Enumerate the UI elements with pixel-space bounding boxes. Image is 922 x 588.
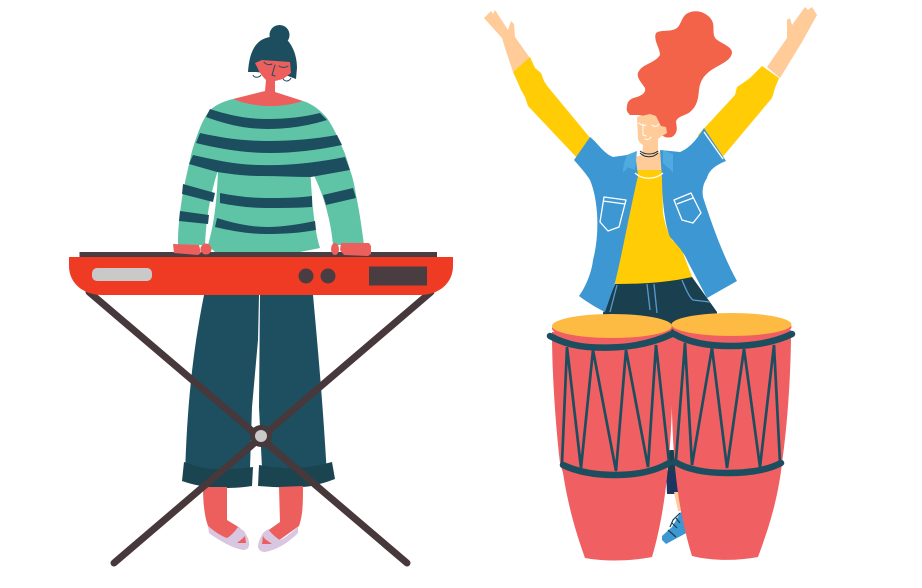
raised arms [484, 7, 817, 78]
shirt neckline [635, 173, 663, 178]
slider [92, 268, 152, 281]
necklace [640, 151, 658, 157]
knobs [298, 268, 336, 284]
pockets [600, 193, 701, 231]
sweater stripes [179, 109, 356, 234]
sweater [178, 99, 364, 252]
hair [627, 11, 732, 138]
left drum body [552, 332, 673, 561]
drummer figure [484, 7, 817, 544]
legs [203, 486, 303, 545]
keys bar [80, 252, 437, 258]
trouser seams [610, 280, 710, 313]
left drum head [552, 314, 672, 340]
sandals [208, 526, 298, 552]
keyboard stand legs [89, 292, 431, 563]
shirt [615, 170, 692, 284]
face features [264, 62, 288, 76]
right drum head [672, 313, 792, 339]
conga drums [550, 313, 792, 561]
keyboard [69, 252, 453, 295]
face features [639, 123, 659, 139]
drum ropes [562, 343, 780, 471]
pianist hands [173, 243, 371, 256]
lower leg and shoe [662, 450, 690, 544]
stand hub [250, 425, 272, 447]
trouser cuffs [182, 462, 335, 488]
collar [623, 150, 673, 173]
hair [248, 25, 297, 79]
trousers [185, 295, 327, 476]
sleeve stripe [704, 132, 723, 159]
jacket [574, 128, 737, 312]
earrings [253, 75, 291, 81]
trousers [603, 277, 717, 340]
drum bands [550, 334, 792, 475]
display [369, 266, 427, 286]
keyboard player figure [178, 25, 364, 552]
right drum body [671, 330, 791, 560]
gap between drums [671, 425, 673, 450]
face and neck [233, 60, 303, 107]
keyboard body [69, 257, 453, 295]
sleeves [513, 57, 779, 160]
face and neck [635, 114, 667, 172]
